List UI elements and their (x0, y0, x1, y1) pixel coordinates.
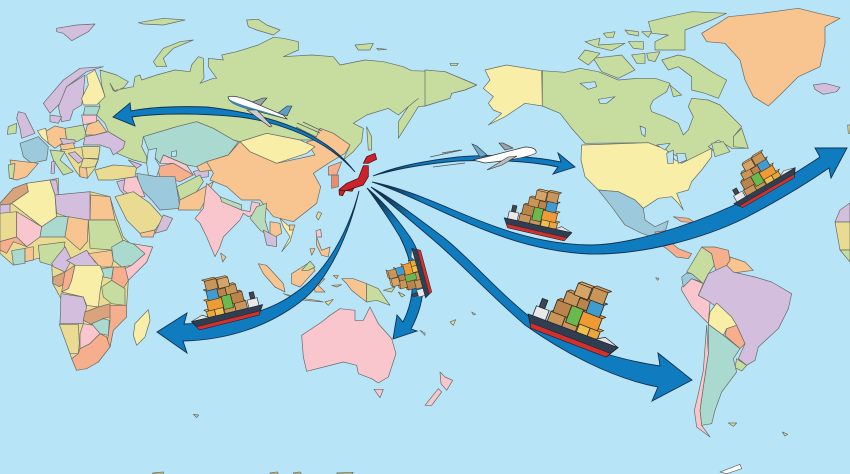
region: Russia and northern Asia (57, 18, 477, 163)
region: North America and Greenland (425, 8, 850, 237)
arrow: Japan to Europe (113, 103, 355, 172)
icon: cargo ship near the Atlantic (718, 140, 799, 210)
region: Africa (0, 178, 153, 370)
icon: airplane over Russia (228, 96, 322, 137)
icon: cargo ship on Pacific route (502, 181, 580, 242)
icon: cargo ship toward Australia (382, 246, 433, 306)
icon: airplane over the Pacific (430, 143, 536, 170)
region: Central and South America (425, 230, 792, 474)
arrow: Japan across the Pacific to eastern North America (372, 148, 847, 254)
region: Japan highlighted in red (339, 153, 377, 196)
region: Southeast Asia and Oceania (153, 237, 425, 474)
arrow: Japan to North America by air (373, 153, 575, 176)
region: west Africa at right edge (835, 203, 850, 262)
arrow: Japan to Africa (157, 191, 359, 353)
icon: cargo ship toward Africa (182, 267, 265, 331)
region: Europe (7, 67, 142, 180)
region: Asia countries (115, 122, 350, 257)
icon: cargo ship toward South America (524, 266, 636, 360)
arrow: Japan to South America (371, 187, 692, 401)
arrow: Japan to Australia (367, 188, 423, 339)
